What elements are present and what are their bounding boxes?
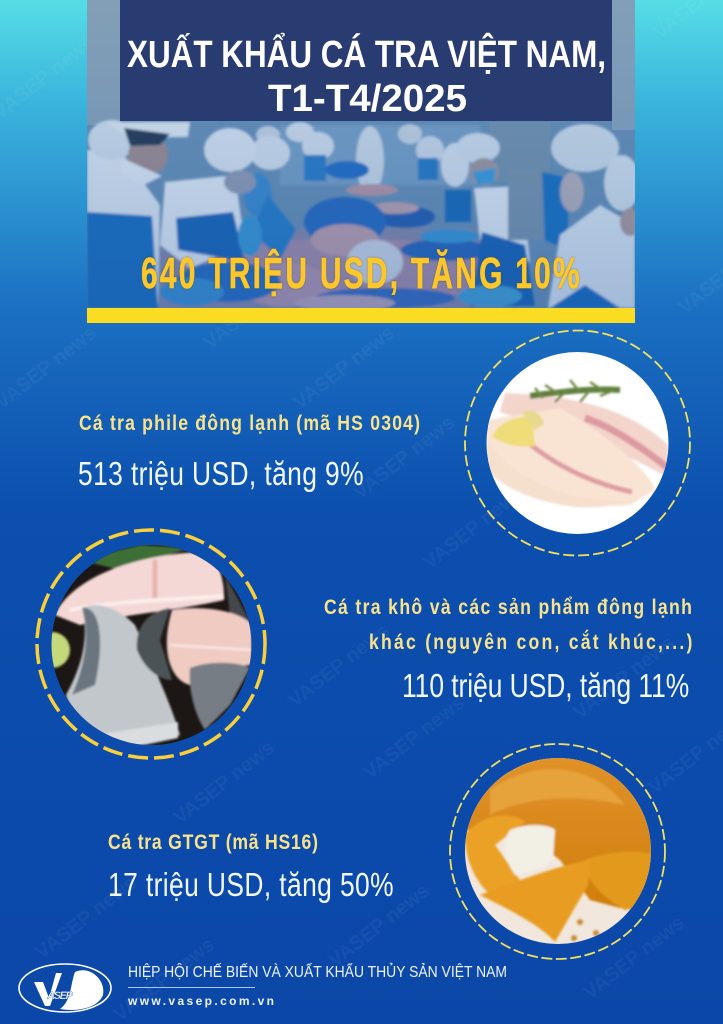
headline figure: 640 TRIỆU USD, TĂNG 10% <box>141 248 580 297</box>
yellow bar <box>87 308 635 323</box>
item 3: value-added text <box>108 831 394 904</box>
watermarks: VASEP news <box>200 262 309 354</box>
title <box>127 31 606 120</box>
worker: second <box>160 175 245 268</box>
item 1: fillet photo in dashed circle <box>465 330 690 556</box>
item 2: dried and other frozen products text: khác (nguyên con, cắt khúc,...) <box>369 628 692 654</box>
watermarks: VASEP news <box>32 872 141 964</box>
association name: HIỆP HỘI CHẾ BIẾN VÀ XUẤT KHẨU THỦY SẢN VIỆT NAM <box>128 962 507 981</box>
watermarks: VASEP news <box>325 880 434 972</box>
item 1: frozen fillet text: 513 triệu USD, tăng 9% <box>78 456 364 493</box>
item 2: dried and other frozen products text <box>324 596 692 705</box>
item 1: frozen fillet text: Cá tra phile đông lạnh (mã HS 0304) <box>79 412 420 435</box>
item 1: frozen fillet text <box>78 412 420 493</box>
VASEP logo <box>19 964 111 1012</box>
watermarks: VASEP news <box>285 620 394 712</box>
watermarks: VASEP news <box>290 322 399 414</box>
item 2: dried and other frozen products text: Cá tra khô và các sản phẩm đông lạnh <box>324 596 692 619</box>
item 2: steaks photo in dashed circle <box>34 530 265 758</box>
worker: left <box>87 150 160 308</box>
item 3: value-added text: 17 triệu USD, tăng 50% <box>108 867 394 904</box>
worker: right <box>456 133 500 163</box>
worker: far right <box>508 170 544 240</box>
item 3: breaded fish photo in dashed circle <box>450 744 665 959</box>
item 3: value-added text: Cá tra GTGT (mã HS16) <box>108 831 318 854</box>
watermarks: VASEP news <box>350 412 459 504</box>
title: XUẤT KHẨU CÁ TRA VIỆT NAM, <box>127 31 606 76</box>
watermarks: VASEP news <box>360 692 469 784</box>
item 2: dried and other frozen products text: 110 triệu USD, tăng 11% <box>402 668 689 705</box>
watermarks: VASEP news <box>110 934 219 1024</box>
watermarks: VASEP news <box>420 482 529 574</box>
watermarks: VASEP news <box>570 632 679 724</box>
website: www.vasep.com.vn <box>127 994 274 1008</box>
header photo: workers processing fish <box>87 0 640 311</box>
VASEP logo: ASEP <box>46 990 74 1002</box>
watermarks: VASEP news <box>580 912 689 1004</box>
title panel <box>120 0 612 121</box>
title: T1-T4/2025 <box>268 78 467 120</box>
watermarks: VASEP news <box>170 737 279 829</box>
